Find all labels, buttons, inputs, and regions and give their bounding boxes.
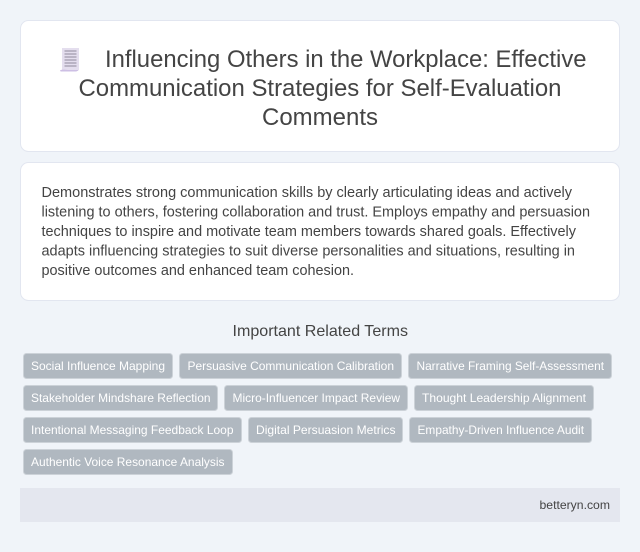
tag list [24, 354, 612, 474]
description text: techniques to inspire and motivate team members towards shared goals. Effectively [42, 224, 577, 240]
icon: document scroll [60, 48, 79, 72]
tag: Digital Persuasion Metrics: Digital Persuasion Metrics [256, 423, 396, 437]
tag: Thought Leadership Alignment: Thought Leadership Alignment [422, 391, 587, 405]
tag: Authentic Voice Resonance Analysis [24, 450, 232, 474]
tag: Social Influence Mapping: Social Influence Mapping [31, 359, 165, 373]
tag: Persuasive Communication Calibration [180, 354, 402, 378]
description text: positive outcomes and enhanced team cohesion. [42, 263, 354, 279]
description text [42, 185, 590, 279]
description text: adapts influencing strategies to suit diverse personalities and situations, resulting in [42, 244, 575, 260]
tag: Social Influence Mapping [24, 354, 172, 378]
tag: Thought Leadership Alignment [414, 386, 594, 410]
tag: Authentic Voice Resonance Analysis: Authentic Voice Resonance Analysis [31, 455, 224, 469]
title text: Communication Strategies for Self-Evaluation [78, 75, 562, 102]
tag: Micro-Influencer Impact Review: Micro-Influencer Impact Review [232, 391, 400, 405]
footer brand: betteryn.com [540, 498, 610, 512]
tag: Intentional Messaging Feedback Loop: Intentional Messaging Feedback Loop [31, 423, 234, 437]
panel: title card [20, 20, 620, 152]
tag: Stakeholder Mindshare Reflection: Stakeholder Mindshare Reflection [31, 391, 210, 405]
heading: related terms: Important Related Terms [232, 323, 408, 340]
tag: Micro-Influencer Impact Review [224, 386, 408, 410]
footer bar [20, 488, 620, 522]
panel: description card [20, 162, 620, 300]
tag: Persuasive Communication Calibration: Persuasive Communication Calibration [188, 359, 394, 373]
title text: Comments [262, 104, 378, 131]
tag: Narrative Framing Self-Assessment [408, 354, 612, 378]
tag: Narrative Framing Self-Assessment: Narrative Framing Self-Assessment [416, 359, 605, 373]
tag: Stakeholder Mindshare Reflection [24, 386, 218, 410]
tag: Empathy-Driven Influence Audit [410, 418, 592, 442]
description text: listening to others, fostering collaboration and trust. Employs empathy and persuasion [42, 204, 590, 220]
tag: Digital Persuasion Metrics [248, 418, 402, 442]
title text: Influencing Others in the Workplace: Effective [105, 46, 586, 73]
tag: Intentional Messaging Feedback Loop [24, 418, 242, 442]
title text [78, 46, 586, 131]
tag: Empathy-Driven Influence Audit: Empathy-Driven Influence Audit [418, 423, 585, 437]
description text: Demonstrates strong communication skills by clearly articulating ideas and actively [42, 185, 573, 201]
